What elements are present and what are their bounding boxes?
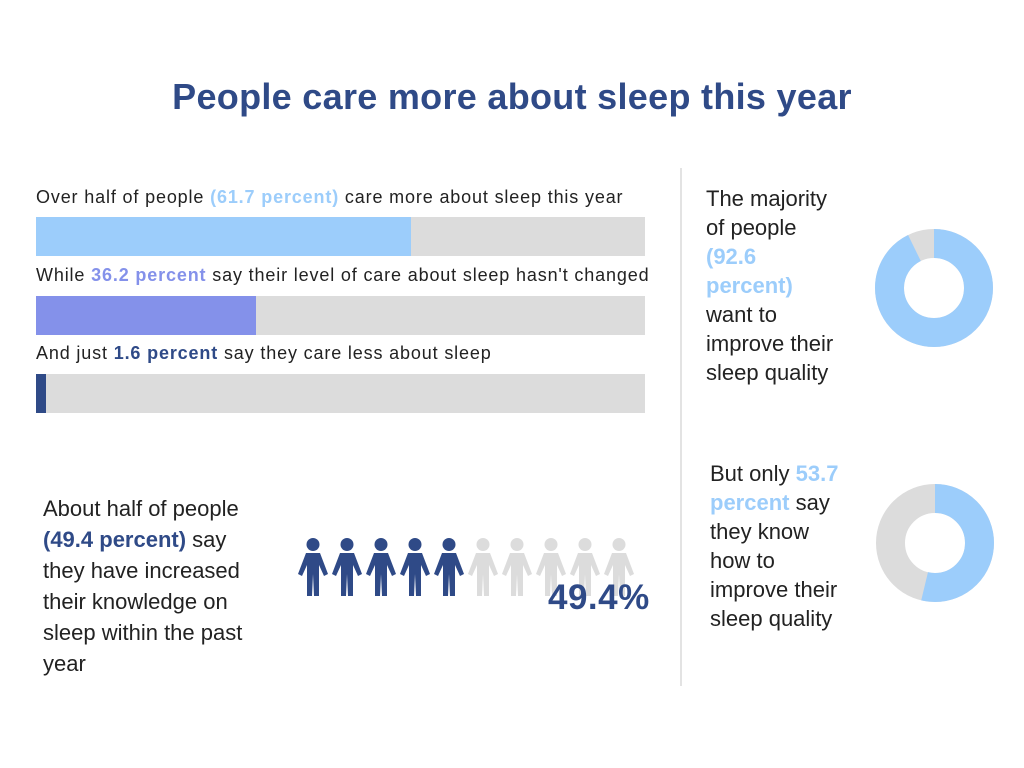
text: majority: percent) [706, 273, 793, 298]
bar 3 [36, 374, 645, 413]
text: majority: of people [706, 215, 797, 240]
bar 2 [36, 296, 645, 335]
text: majority: (92.6 [706, 244, 756, 269]
text: knowledge: sleep within the past [43, 620, 242, 645]
text: know how: they know [710, 519, 809, 544]
text: majority [706, 186, 833, 385]
text: knowledge [43, 496, 242, 676]
title: People care more about sleep this year [172, 76, 852, 117]
text: know how [710, 461, 838, 631]
donut 1 [875, 229, 993, 347]
bar 1 [36, 217, 645, 256]
donut 2 [876, 484, 994, 602]
text: majority: sleep quality [706, 360, 828, 385]
bar label 2: While 36.2 percent say their level of care about sleep hasn't changed [36, 265, 649, 285]
pictogram people [298, 538, 634, 596]
divider [680, 168, 682, 686]
text: knowledge: they have increased [43, 558, 240, 583]
text: know how: percent say [710, 490, 830, 515]
text: know how: sleep quality [710, 606, 832, 631]
bar label 1: Over half of people (61.7 percent) care more about sleep this year [36, 187, 623, 207]
text: knowledge: year [43, 651, 86, 676]
text: knowledge: About half of people [43, 496, 239, 521]
text: know how: improve their [710, 577, 837, 602]
text: know how: how to [710, 548, 775, 573]
text: knowledge: (49.4 percent) say [43, 527, 226, 552]
big percent: 49.4% [548, 578, 650, 617]
text: majority: The majority [706, 186, 827, 211]
text: majority: improve their [706, 331, 833, 356]
bar label 3: And just 1.6 percent say they care less about sleep [36, 343, 492, 363]
text: know how: But only 53.7 [710, 461, 838, 486]
text: knowledge: their knowledge on [43, 589, 228, 614]
text: majority: want to [706, 302, 777, 327]
